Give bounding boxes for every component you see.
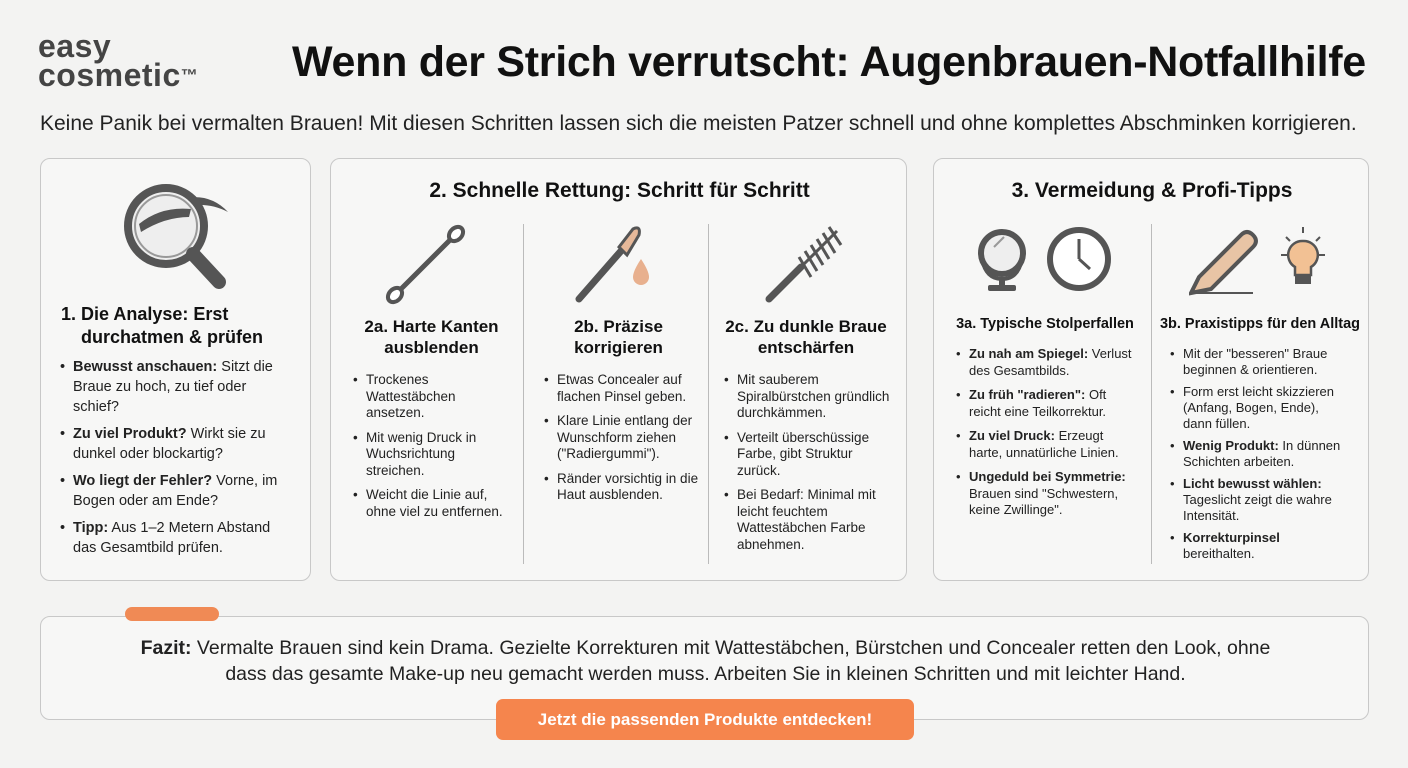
heading: vermeidung: 3. Vermeidung & Profi-Tipps <box>1012 179 1292 202</box>
icon: brush with drop <box>576 226 649 302</box>
logo: cosmetic™ <box>38 57 198 93</box>
column: 2a <box>354 317 503 518</box>
column: 2b: Ränder vorsichtig in die Haut ausblenden. <box>557 470 698 502</box>
panel: rettung <box>330 158 907 581</box>
column: 3a: Zu nah am Spiegel: Verlust des Gesamtbilds. <box>969 346 1132 378</box>
icon: cotton swab <box>386 224 466 304</box>
column: 2c: 2c. Zu dunkle Braue <box>725 317 887 336</box>
text: fazit: Fazit: Vermalte Brauen sind kein Drama. Gezielte Korrekturen mit Wattestäbchen, Bürstchen und Concealer retten den Look, ohne <box>141 637 1270 659</box>
column: 2a: ausblenden <box>384 338 479 357</box>
panel: analyse <box>40 158 311 581</box>
column: 3a: Ungeduld bei Symmetrie: Brauen sind "Schwestern, keine Zwillinge". <box>969 469 1126 517</box>
icon: mirror and clock <box>978 227 1111 291</box>
column: 2c: Mit sauberem Spiralbürstchen gründlich durchkämmen. <box>737 372 889 420</box>
column: 3b: Form erst leicht skizzieren (Anfang, Bogen, Ende), dann füllen. <box>1183 384 1334 431</box>
subtitle: Keine Panik bei vermalten Brauen! Mit diesen Schritten lassen sich die meisten Patzer schnell und ohne komplettes Abschminken korrigieren. <box>40 112 1357 135</box>
column: 2c: Verteilt überschüssige Farbe, gibt Struktur zurück. <box>737 430 869 478</box>
column: 3a: Zu viel Druck: Erzeugt harte, unnatürliche Linien. <box>969 428 1119 460</box>
panel: fazit <box>40 616 1369 720</box>
column: 3a: Zu früh "radieren": Oft reicht eine Teilkorrektur. <box>969 387 1106 418</box>
column: 2a: Mit wenig Druck in Wuchsrichtung streichen. <box>366 430 476 478</box>
column: 2c <box>724 317 889 552</box>
list: analyse: Wo liegt der Fehler? Vorne, im Bogen oder am Ende? <box>73 473 277 509</box>
list: analyse: Bewusst anschauen: Sitzt die Braue zu hoch, zu tief oder schief? <box>73 359 273 415</box>
accent tab <box>125 607 219 621</box>
column: 2a: Weicht die Linie auf, ohne viel zu entfernen. <box>366 487 503 518</box>
column: 2b: Etwas Concealer auf flachen Pinsel geben. <box>557 372 686 404</box>
heading: analyse: 1. Die Analyse: Erst <box>61 304 228 324</box>
column: 2b: 2b. Präzise <box>574 317 663 336</box>
heading: rettung: 2. Schnelle Rettung: Schritt für Schritt <box>429 179 810 202</box>
column: 3b <box>1160 316 1360 561</box>
logo <box>38 28 198 93</box>
button: products <box>496 699 914 740</box>
list: analyse <box>60 359 277 556</box>
icon: spoolie <box>766 226 842 302</box>
icon: magnifier with brow <box>124 184 228 289</box>
column: 2a: Trockenes Wattestäbchen ansetzen. <box>366 372 456 420</box>
title: Wenn der Strich verrutscht: Augenbrauen-Notfallhilfe <box>292 38 1366 86</box>
column: 2c: entschärfen <box>758 338 854 357</box>
column: 3a: 3a. Typische Stolperfallen <box>956 316 1134 332</box>
text: fazit: dass das gesamte Make-up neu gemacht werden muss. Arbeiten Sie in kleinen Schritten und mit leichter Hand. <box>225 663 1186 685</box>
heading: analyse <box>61 304 263 347</box>
column: 3b: Licht bewusst wählen: Tageslicht zeigt die wahre Intensität. <box>1183 476 1332 523</box>
text: fazit <box>141 637 1270 685</box>
column: 2c: Bei Bedarf: Minimal mit leicht feuchtem Wattestäbchen Farbe abnehmen. <box>737 487 876 552</box>
column: 3b: 3b. Praxistipps für den Alltag <box>1160 316 1360 332</box>
heading: analyse: durchatmen & prüfen <box>81 327 263 347</box>
button: products: Jetzt die passenden Produkte entdecken! <box>538 710 872 729</box>
column: 2b: korrigieren <box>574 338 663 357</box>
icon: pencil and bulb <box>1189 227 1325 296</box>
logo: easy <box>38 28 111 64</box>
panel: vermeidung <box>933 158 1369 581</box>
list: analyse: Tipp: Aus 1–2 Metern Abstand das Gesamtbild prüfen. <box>73 520 270 556</box>
column: 3b: Wenig Produkt: In dünnen Schichten arbeiten. <box>1183 438 1340 469</box>
column: 2b: Klare Linie entlang der Wunschform ziehen ("Radiergummi"). <box>557 413 692 461</box>
column: 2b <box>544 317 698 502</box>
column: 3b: Mit der "besseren" Braue beginnen & orientieren. <box>1183 346 1327 377</box>
column: 3a <box>956 316 1134 517</box>
column: 3b: Korrekturpinsel bereithalten. <box>1183 530 1280 561</box>
list: analyse: Zu viel Produkt? Wirkt sie zu dunkel oder blockartig? <box>73 426 266 462</box>
column: 2a: 2a. Harte Kanten <box>364 317 499 336</box>
